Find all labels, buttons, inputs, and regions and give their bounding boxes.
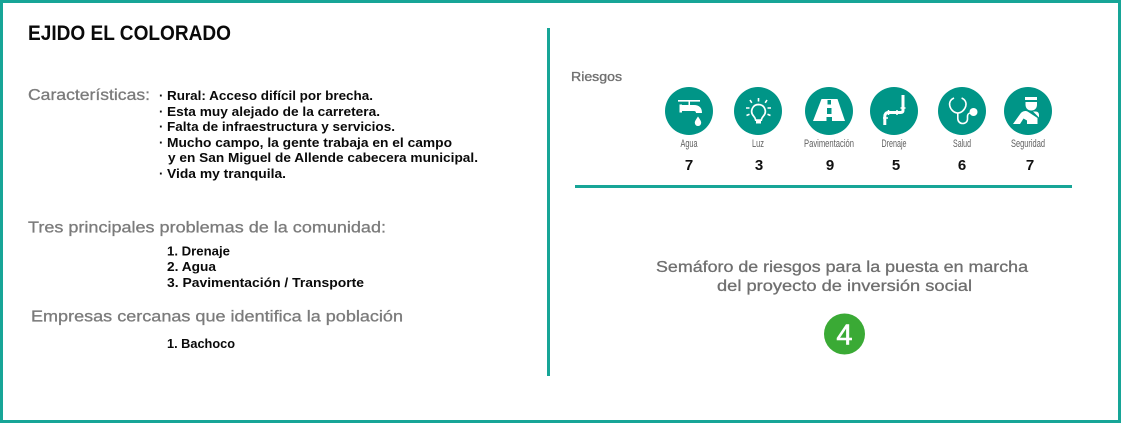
title: EJIDO EL COLORADO bbox=[28, 22, 231, 45]
list: problemas: 3. Pavimentación / Transporte bbox=[167, 275, 364, 290]
heading: características: Características: bbox=[28, 87, 150, 104]
semáforo heading: Semáforo de riesgos para la puesta en marcha bbox=[656, 259, 1028, 276]
risk: seguridad: 7 bbox=[1026, 157, 1034, 174]
list: características: Rural: Acceso difícil por brecha. bbox=[167, 88, 373, 103]
risk: luz: Luz bbox=[752, 138, 764, 150]
list: empresas: 1. Bachoco bbox=[167, 336, 235, 351]
list: problemas bbox=[167, 244, 364, 290]
horizontal divider bbox=[575, 185, 1072, 188]
icon: road bbox=[805, 87, 853, 135]
list: características: · bbox=[159, 166, 163, 181]
semáforo heading: del proyecto de inversión social bbox=[717, 278, 972, 295]
icon: water tap bbox=[665, 87, 713, 135]
icon: guard bbox=[1004, 87, 1052, 135]
list: características: Vida my tranquila. bbox=[167, 166, 286, 181]
risk: agua: 7 bbox=[685, 157, 693, 174]
risk: seguridad: Seguridad bbox=[1011, 138, 1045, 150]
list: características: Falta de infraestructura y servicios. bbox=[167, 119, 395, 134]
heading: riesgos: Riesgos bbox=[571, 69, 623, 84]
list: características bbox=[159, 88, 478, 181]
heading: tres principales problemas: Tres principales problemas de la comunidad: bbox=[28, 220, 386, 236]
heading: empresas cercanas: Empresas cercanas que identifica la población bbox=[31, 308, 403, 326]
list: problemas: 1. Drenaje bbox=[167, 244, 230, 258]
icon: light bulb bbox=[734, 87, 782, 135]
risk: agua: Agua bbox=[680, 138, 698, 150]
risk: pavimentación bbox=[804, 87, 854, 174]
risk: salud: 6 bbox=[958, 157, 966, 174]
risk: drenaje bbox=[870, 87, 918, 174]
risk: luz: 3 bbox=[755, 157, 763, 174]
vertical divider bbox=[547, 28, 550, 376]
semáforo badge: 4 bbox=[836, 320, 853, 352]
semáforo heading bbox=[656, 259, 1028, 295]
list: características: y en San Miguel de Allende cabecera municipal. bbox=[168, 150, 478, 165]
icon: stethoscope bbox=[938, 87, 986, 135]
risk: salud bbox=[938, 87, 986, 174]
list: características: Mucho campo, la gente trabaja en el campo bbox=[167, 135, 452, 150]
semáforo badge bbox=[824, 314, 865, 354]
risk: agua bbox=[665, 87, 713, 174]
risk: seguridad bbox=[1004, 87, 1052, 174]
risk: pavimentación: 9 bbox=[826, 157, 834, 174]
list: características: · bbox=[159, 104, 163, 119]
risk: drenaje: Drenaje bbox=[882, 138, 906, 150]
list: problemas: 2. Agua bbox=[167, 259, 217, 274]
risk: luz bbox=[734, 87, 782, 174]
list: características: Esta muy alejado de la carretera. bbox=[167, 104, 380, 119]
list: características: · bbox=[159, 135, 163, 150]
list: características: · bbox=[159, 88, 163, 103]
risk: drenaje: 5 bbox=[892, 157, 900, 174]
risk: salud: Salud bbox=[953, 138, 971, 150]
risk: pavimentación: Pavimentación bbox=[804, 138, 854, 150]
list: características: · bbox=[159, 119, 163, 134]
icon: pipe bbox=[870, 87, 918, 135]
